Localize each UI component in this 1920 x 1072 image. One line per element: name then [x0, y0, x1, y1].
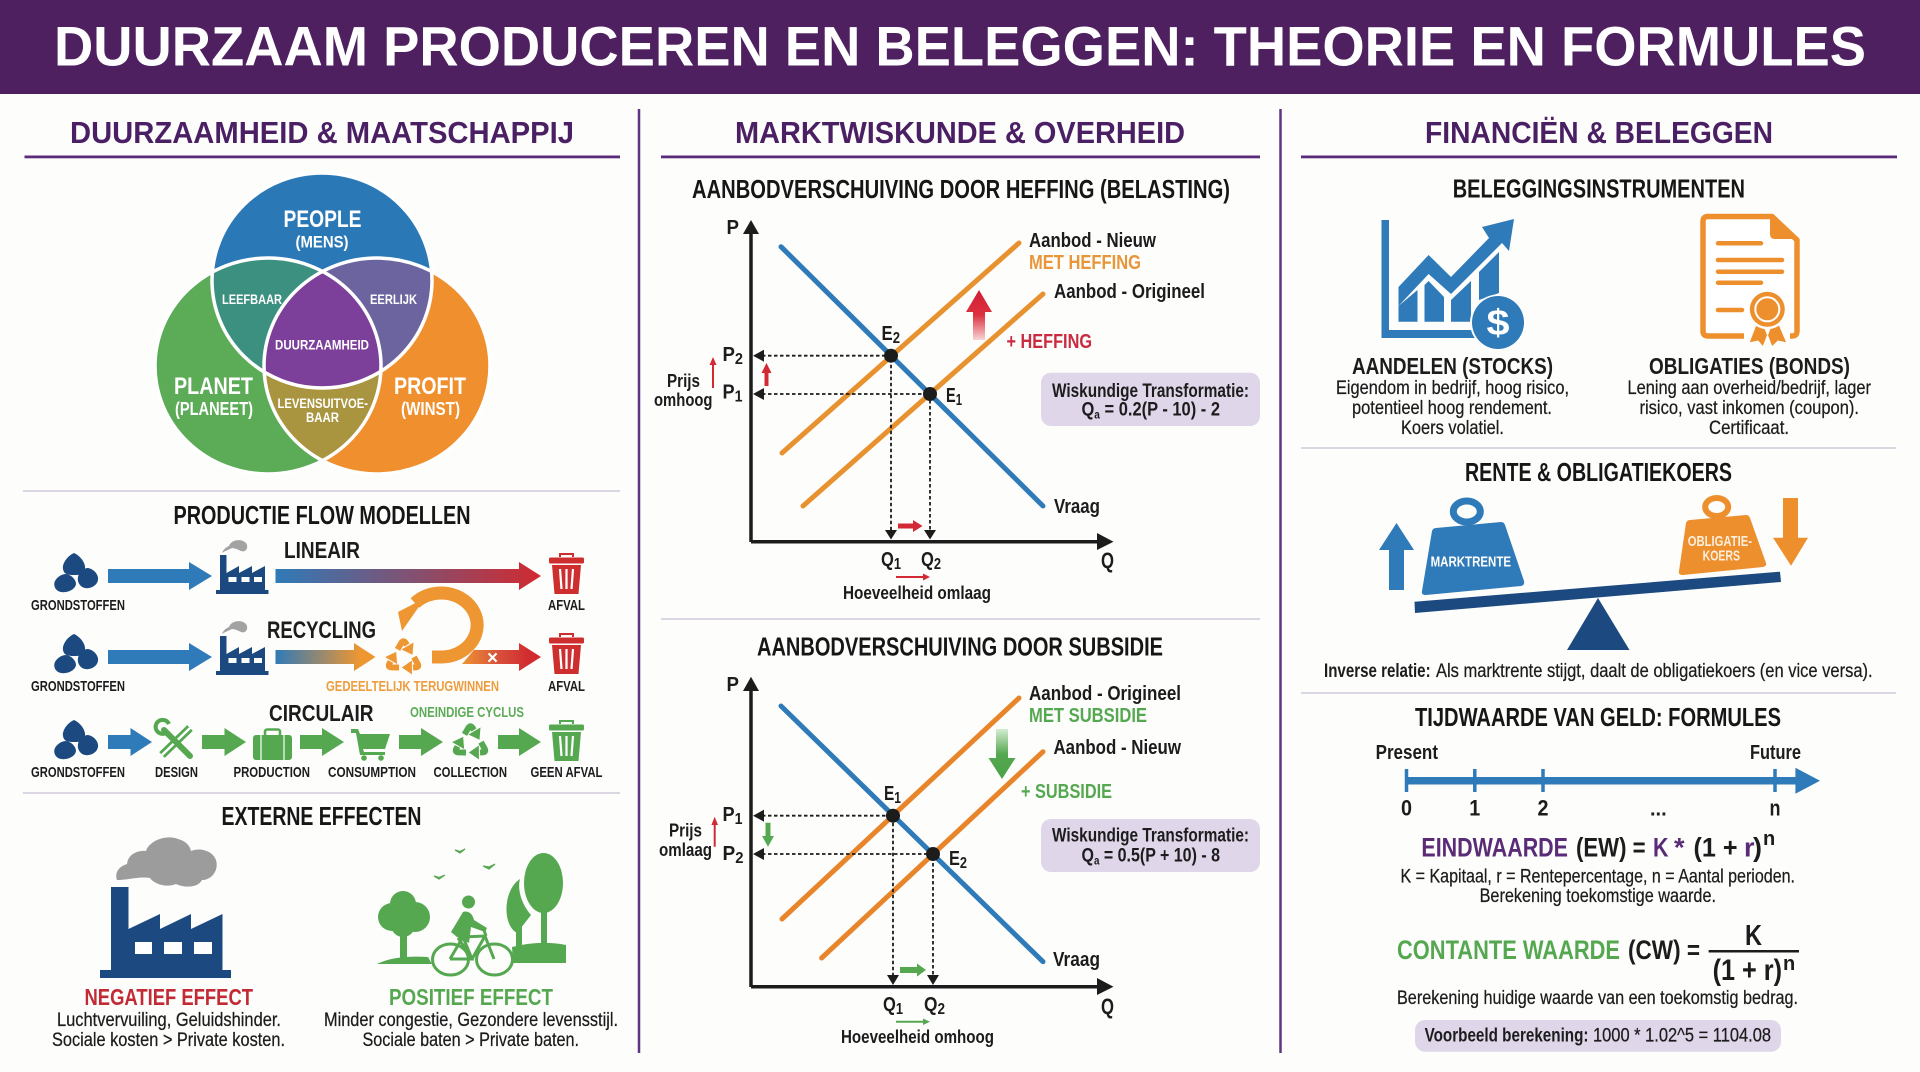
- chart: aanbodverschuiving door heffing: Aanbod - Nieuw: [1029, 229, 1156, 252]
- callout: voorbeeld berekening: Voorbeeld berekening:: [1425, 1026, 1588, 1047]
- formule: contante waarde: CONTANTE WAARDE: [1397, 935, 1620, 965]
- flow row: circulair: PRODUCTION: [234, 764, 310, 781]
- chart: aanbodverschuiving door subsidie: P: [722, 842, 736, 865]
- chart: aanbodverschuiving door heffing: 1: [735, 388, 743, 406]
- flow row: circulair: CIRCULAIR: [269, 700, 374, 726]
- callout: wiskundige transformatie subsidie: Q: [1082, 844, 1097, 866]
- tekst: obligaties: Certificaat.: [1709, 417, 1789, 439]
- tekst: uitleg eindwaarde: [1400, 866, 1795, 907]
- formule: contante waarde: [1397, 920, 1799, 987]
- flow row: circulair: GEEN AFVAL: [530, 764, 602, 781]
- tijdlijn present tot future: Present: [1376, 742, 1438, 764]
- chart: aanbodverschuiving door heffing: P: [722, 380, 736, 404]
- chart: aanbodverschuiving door heffing: Q: [881, 548, 897, 571]
- chart: aanbodverschuiving door subsidie: 1: [896, 1001, 903, 1018]
- tijdlijn present tot future: 1: [1469, 796, 1480, 821]
- flow row: circulair: CONSUMPTION: [328, 764, 416, 781]
- chart: aanbodverschuiving door subsidie: 1: [735, 811, 743, 828]
- chart: aanbodverschuiving door heffing: MET HEFFING: [1029, 251, 1141, 274]
- positief effect tekst: Minder congestie, Gezondere levensstijl.: [324, 1009, 618, 1031]
- icon: obligatie certificaat: [1703, 216, 1797, 347]
- callout: wiskundige transformatie subsidie: = 0.5(P + 10) - 8: [1099, 844, 1220, 866]
- chart: aanbodverschuiving door heffing: Vraag: [1054, 495, 1100, 518]
- negatief effect tekst: Luchtvervuiling, Geluidshinder.: [57, 1009, 281, 1031]
- callout: wiskundige transformatie heffing: Q: [1082, 398, 1097, 420]
- icon: vervuilende fabriek: [100, 837, 231, 978]
- chart: aanbodverschuiving door heffing: 2: [735, 351, 743, 368]
- panel: duurzaamheid en maatschappij: [23, 115, 620, 1051]
- title banner: DUURZAAM PRODUCEREN EN BELEGGEN: THEORIE EN FORMULES: [54, 14, 1866, 78]
- chart: aanbodverschuiving door subsidie: 2: [735, 850, 744, 867]
- icon: aandelen grafiek met dollar: $: [1486, 302, 1510, 343]
- venn diagram: people planet profit: PROFIT: [394, 373, 466, 400]
- chart: aanbodverschuiving door heffing: omhoog: [654, 390, 712, 410]
- formule: eindwaarde: ): [1753, 833, 1762, 863]
- tekst: aandelen: AANDELEN (STOCKS): [1352, 353, 1553, 379]
- heading: productie flow modellen: PRODUCTIE FLOW MODELLEN: [174, 502, 470, 530]
- tekst: inverse relatie: Inverse relatie:: [1324, 661, 1431, 682]
- formule: eindwaarde: (1 +: [1694, 833, 1738, 863]
- section: tijdwaarde van geld: [1376, 704, 1820, 1052]
- formule: eindwaarde: r: [1744, 833, 1755, 863]
- tijdlijn present tot future: n: [1770, 796, 1780, 821]
- positief effect tekst: POSITIEF EFFECT: [389, 984, 554, 1010]
- flow row: circulair: [31, 700, 602, 781]
- section: externe effecten: [52, 803, 618, 1051]
- chart: aanbodverschuiving door heffing: E: [882, 322, 895, 345]
- icon: weegschaal met gewichten: KOERS: [1703, 548, 1740, 565]
- chart: aanbodverschuiving door heffing: Hoeveelheid omlaag: [843, 583, 991, 603]
- venn diagram: people planet profit: DUURZAAMHEID: [275, 336, 369, 352]
- chart: aanbodverschuiving door heffing: E: [946, 384, 960, 407]
- chart: aanbodverschuiving door subsidie: MET SUBSIDIE: [1029, 704, 1147, 727]
- callout: wiskundige transformatie heffing: Wiskundige Transformatie:: [1052, 380, 1249, 402]
- heading: duurzaamheid en maatschappij: DUURZAAMHEID & MAATSCHAPPIJ: [70, 115, 574, 150]
- callout: wiskundige transformatie heffing: [1041, 373, 1260, 426]
- chart: aanbodverschuiving door subsidie: Q: [924, 993, 940, 1016]
- tekst: uitleg eindwaarde: K = Kapitaal, r = Rentepercentage, n = Aantal perioden.: [1400, 866, 1795, 888]
- chart: aanbodverschuiving door subsidie: + SUBSIDIE: [1021, 780, 1112, 803]
- chart: aanbodverschuiving door heffing: Q: [921, 548, 937, 571]
- formule: contante waarde: n: [1783, 953, 1795, 975]
- formule: eindwaarde: [1421, 828, 1775, 863]
- heading: marktwiskunde en overheid: MARKTWISKUNDE & OVERHEID: [735, 115, 1185, 150]
- formule: contante waarde: (1 + r): [1713, 954, 1782, 987]
- chart: aanbodverschuiving door heffing: P: [726, 216, 739, 239]
- chart: aanbodverschuiving door subsidie: E: [949, 847, 963, 870]
- tekst: obligaties: OBLIGATIES (BONDS): [1649, 353, 1850, 379]
- chart: aanbodverschuiving door heffing: 1: [894, 556, 901, 573]
- callout: voorbeeld berekening: 1000 * 1.02^5 = 1104.08: [1593, 1025, 1771, 1047]
- chart: aanbodverschuiving door subsidie: 1: [894, 790, 901, 807]
- negatief effect tekst: [52, 984, 285, 1051]
- flow row: circulair: ONEINDIGE CYCLUS: [410, 704, 524, 721]
- chart: aanbodverschuiving door heffing: [654, 176, 1260, 603]
- tijdlijn present tot future: 2: [1538, 796, 1548, 821]
- chart: aanbodverschuiving door subsidie: Vraag: [1053, 948, 1100, 971]
- icon: weegschaal met gewichten: MARKTRENTE: [1431, 554, 1511, 571]
- tekst: aandelen: potentieel hoog rendement.: [1352, 397, 1552, 419]
- flow row: lineair: AFVAL: [548, 597, 585, 614]
- tijdlijn present tot future: [1376, 742, 1820, 821]
- flow row: circulair: COLLECTION: [434, 764, 507, 781]
- chart: aanbodverschuiving door subsidie: 2: [960, 855, 967, 872]
- negatief effect tekst: Sociale kosten > Private kosten.: [52, 1029, 285, 1051]
- formule: eindwaarde: K: [1653, 833, 1669, 863]
- chart: aanbodverschuiving door subsidie: Hoeveelheid omhoog: [841, 1027, 994, 1047]
- chart: aanbodverschuiving door heffing: + HEFFING: [1006, 330, 1092, 353]
- chart: aanbodverschuiving door heffing: 1: [956, 392, 962, 409]
- tekst: obligaties: risico, vast inkomen (coupon).: [1640, 397, 1859, 419]
- venn diagram: people planet profit: (PLANEET): [175, 399, 253, 419]
- flow row: recycling: [31, 593, 585, 695]
- chart: aanbodverschuiving door heffing: Q: [1101, 548, 1114, 573]
- negatief effect tekst: NEGATIEF EFFECT: [84, 984, 253, 1010]
- venn diagram: people planet profit: BAAR: [306, 410, 339, 425]
- flow row: circulair: GRONDSTOFFEN: [31, 764, 125, 781]
- chart: aanbodverschuiving door heffing: 2: [934, 556, 941, 573]
- chart: aanbodverschuiving door subsidie: omlaag: [659, 840, 712, 860]
- formule: eindwaarde: *: [1674, 833, 1685, 863]
- chart: aanbodverschuiving door subsidie: P: [722, 803, 736, 826]
- heading: rente en obligatiekoers: RENTE & OBLIGATIEKOERS: [1465, 459, 1732, 487]
- section: beleggingsinstrumenten: [1336, 176, 1871, 439]
- venn diagram: people planet profit: EERLIJK: [370, 292, 417, 307]
- chart title: subsidie: AANBODVERSCHUIVING DOOR SUBSIDIE: [757, 634, 1163, 662]
- formule: eindwaarde: (EW) =: [1576, 833, 1646, 863]
- heading: externe effecten: EXTERNE EFFECTEN: [222, 803, 422, 831]
- formule: eindwaarde: EINDWAARDE: [1421, 833, 1568, 863]
- chart: aanbodverschuiving door subsidie: Q: [883, 993, 899, 1016]
- tekst: obligaties: Lening aan overheid/bedrijf, lager: [1628, 377, 1871, 399]
- formule: contante waarde: (CW) =: [1628, 935, 1700, 965]
- chart: aanbodverschuiving door heffing: Prijs: [667, 371, 700, 391]
- venn diagram: people planet profit: LEVENSUITVOE-: [278, 396, 368, 411]
- tekst: aandelen: Eigendom in bedrijf, hoog risico,: [1336, 377, 1569, 399]
- icon: aandelen grafiek met dollar: [1382, 219, 1526, 350]
- tekst: uitleg contante waarde: Berekening huidige waarde van een toekomstig bedrag.: [1397, 987, 1798, 1009]
- tekst: aandelen: [1336, 353, 1569, 439]
- positief effect tekst: Sociale baten > Private baten.: [362, 1029, 579, 1051]
- callout: wiskundige transformatie subsidie: Wiskundige Transformatie:: [1052, 825, 1249, 847]
- chart: aanbodverschuiving door heffing: P: [722, 343, 736, 366]
- chart: aanbodverschuiving door subsidie: E: [884, 782, 898, 805]
- chart: aanbodverschuiving door subsidie: Prijs: [669, 821, 702, 841]
- flow row: lineair: LINEAIR: [284, 537, 360, 563]
- venn diagram: people planet profit: LEEFBAAR: [222, 292, 282, 307]
- flow row: lineair: GRONDSTOFFEN: [31, 597, 125, 614]
- flow row: recycling: ×: [487, 648, 498, 669]
- callout: voorbeeld berekening: [1415, 1020, 1781, 1052]
- chart: aanbodverschuiving door subsidie: P: [726, 673, 739, 696]
- formule: eindwaarde: n: [1763, 828, 1775, 850]
- callout: wiskundige transformatie subsidie: [1041, 819, 1260, 872]
- positief effect tekst: [324, 984, 618, 1051]
- icon: fietser in groen park: [377, 849, 566, 975]
- section: productie flow modellen: [31, 502, 602, 781]
- chart: aanbodverschuiving door subsidie: Aanbod - Nieuw: [1054, 736, 1181, 759]
- flow row: recycling: GRONDSTOFFEN: [31, 678, 125, 695]
- venn diagram: people planet profit: PLANET: [174, 373, 253, 400]
- venn diagram: people planet profit: (MENS): [296, 232, 348, 252]
- callout: wiskundige transformatie subsidie: a: [1094, 854, 1100, 868]
- tijdlijn present tot future: Future: [1750, 742, 1801, 764]
- flow row: circulair: DESIGN: [155, 764, 198, 781]
- venn diagram: people planet profit: PEOPLE: [284, 206, 362, 233]
- venn diagram: people planet profit: (WINST): [401, 399, 460, 419]
- tijdlijn present tot future: ...: [1650, 799, 1667, 821]
- panel: marktwiskunde en overheid: [654, 115, 1260, 1047]
- formule: contante waarde: K: [1745, 920, 1762, 952]
- chart: aanbodverschuiving door subsidie: [659, 634, 1260, 1047]
- title banner: [0, 0, 1920, 94]
- tekst: obligaties: [1628, 353, 1871, 439]
- icon: weegschaal met gewichten: [1379, 498, 1808, 650]
- heading: financien en beleggen: FINANCIËN & BELEGGEN: [1425, 115, 1773, 150]
- icon: weegschaal met gewichten: OBLIGATIE-: [1688, 533, 1752, 550]
- chart title: heffing: AANBODVERSCHUIVING DOOR HEFFING (BELASTING): [692, 176, 1230, 204]
- tijdlijn present tot future: 0: [1401, 796, 1412, 821]
- chart: aanbodverschuiving door heffing: 2: [893, 330, 900, 347]
- flow row: recycling: AFVAL: [548, 678, 585, 695]
- chart: aanbodverschuiving door subsidie: 2: [937, 1001, 945, 1018]
- chart: aanbodverschuiving door subsidie: Q: [1101, 994, 1114, 1019]
- heading: tijdwaarde van geld: TIJDWAARDE VAN GELD: FORMULES: [1415, 704, 1781, 732]
- venn diagram: people planet profit: [155, 173, 490, 474]
- callout: wiskundige transformatie heffing: a: [1094, 408, 1100, 422]
- panel: financien en beleggen: [1301, 115, 1897, 1052]
- flow row: recycling: RECYCLING: [267, 617, 376, 644]
- chart: aanbodverschuiving door subsidie: Aanbod - Origineel: [1029, 682, 1181, 705]
- tekst: uitleg eindwaarde: Berekening toekomstige waarde.: [1480, 885, 1716, 907]
- flow row: recycling: GEDEELTELIJK TERUGWINNEN: [326, 678, 499, 695]
- heading: beleggingsinstrumenten: BELEGGINGSINSTRUMENTEN: [1453, 176, 1745, 204]
- tekst: aandelen: Koers volatiel.: [1401, 417, 1504, 439]
- section: rente en obligatiekoers: [1324, 459, 1873, 682]
- flow row: lineair: [31, 537, 585, 614]
- chart: aanbodverschuiving door heffing: Aanbod - Origineel: [1054, 280, 1205, 303]
- callout: wiskundige transformatie heffing: = 0.2(P - 10) - 2: [1100, 398, 1220, 420]
